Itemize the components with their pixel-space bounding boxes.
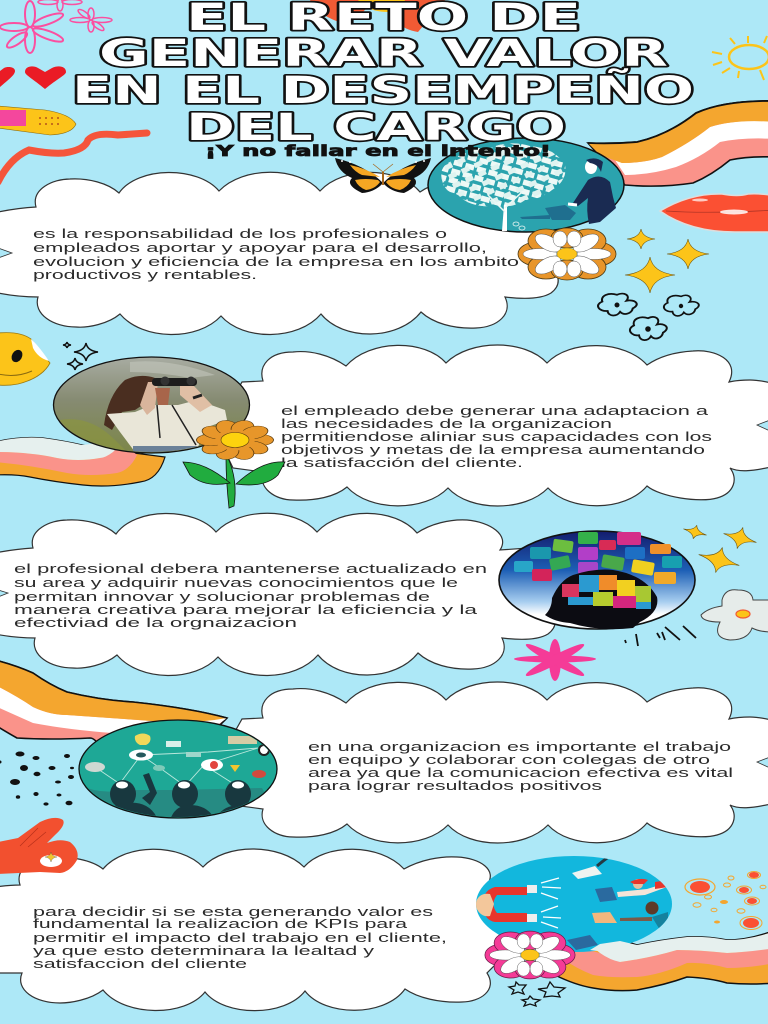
image: head with puzzle [499, 531, 695, 629]
text block 3 [14, 562, 487, 630]
title: EN EL DESEMPEÑO [72, 68, 694, 112]
text block 3: el profesional debera mantenerse actualizado en [14, 562, 487, 576]
icon: hearts [0, 66, 66, 89]
subtitle: ¡Y no fallar en el intento! [205, 142, 551, 160]
text block 2: permitiendose aliniar sus capacidades con los [281, 430, 712, 444]
icon: smiley [0, 333, 50, 385]
icon: orange dots [685, 872, 766, 930]
text block 1: productivos y rentables. [33, 268, 257, 282]
icon: gray flower [701, 590, 768, 640]
icon: pink star flower [514, 639, 596, 681]
title [72, 0, 694, 149]
notches on cloud edges [0, 248, 768, 768]
icon: red squiggle [0, 133, 147, 182]
ribbon tip overlay [590, 941, 637, 952]
icon: red hand [0, 818, 78, 874]
text block 1 [33, 227, 519, 282]
text block 5: ya que esto determinara la lealtad y [33, 944, 375, 958]
text block 3: manera creativa para mejorar la eficiencia y la [14, 603, 477, 617]
text block 2 [281, 404, 712, 470]
text block 1: evolucion y eficiencia de la empresa en los ambito [33, 255, 519, 269]
text block 4 [308, 740, 733, 793]
panel: cloud 2 [215, 345, 768, 506]
image: magnet and people [475, 856, 672, 952]
icon: outlined flowers [598, 294, 699, 340]
text block 2: el empleado debe generar una adaptacion a [281, 404, 708, 418]
image: woman with binoculars [54, 357, 250, 455]
icon: yellow stars [625, 229, 709, 293]
ribbon: bottom right [555, 930, 768, 991]
icon: daisy orange [518, 228, 616, 280]
text block 4: area ya que la comunicacion efectiva es vital [308, 766, 733, 780]
text block 5 [33, 905, 447, 971]
ribbon: left lower [0, 660, 227, 747]
icon: dots [0, 752, 74, 806]
ribbon: top right [588, 101, 768, 186]
text block 2: objetivos y metas de la empresa aumentando [281, 443, 705, 457]
text block 3: su area y adquirir nuevas conocimientos que le [14, 576, 458, 590]
panel: cloud 4 [215, 682, 768, 843]
icon: pink flowers [0, 0, 112, 53]
text block 4: en equipo y colaborar con colegas de otro [308, 753, 710, 767]
title: GENERAR VALOR [99, 32, 668, 75]
icon: tick marks [625, 626, 696, 646]
ribbon: left middle [0, 438, 165, 486]
panel: cloud 1 [0, 172, 558, 335]
text block 5: fundamental la realizacion de KPIs para [33, 917, 407, 931]
text block 4: en una organizacion es importante el trabajo [308, 740, 731, 754]
panel: cloud 3 [0, 513, 555, 676]
text block 5: permitir el impacto del trabajo en el cliente, [33, 931, 447, 945]
text block 2: las necesidades de la organizacion [281, 417, 612, 431]
image: network and silhouettes [75, 720, 280, 820]
text block 4: para lograr resultados positivos [308, 779, 602, 793]
text block 2: la satisfacción del cliente. [281, 456, 523, 470]
icon: bandage [0, 106, 76, 135]
icon: sparkles outline [63, 342, 98, 370]
title: DEL CARGO [186, 106, 566, 149]
text block 5: para decidir si se esta generando valor es [33, 905, 433, 919]
icon: sun [712, 36, 768, 80]
panel: cloud 5 [0, 849, 510, 1011]
icon: yellow stars 3 [682, 522, 759, 578]
text block 1: empleados aportar y apoyar para el desarrollo, [33, 241, 487, 255]
icon: butterfly [335, 158, 431, 193]
icon: lips [660, 194, 768, 232]
text block 1: es la responsabilidad de los profesionales o [33, 227, 447, 241]
text block 3: permitan innovar y solucionar problemas de [14, 590, 430, 604]
text block 5: satisfaccion del cliente [33, 957, 247, 971]
icon: flower behind title [310, 0, 445, 32]
image: money tree and man [428, 138, 624, 232]
icon: sunflower [183, 419, 285, 508]
icon: daisy pink [485, 931, 575, 979]
text block 3: efectiviad de la orgnaizacion [14, 616, 297, 630]
icon: outlined small stars [509, 982, 565, 1006]
